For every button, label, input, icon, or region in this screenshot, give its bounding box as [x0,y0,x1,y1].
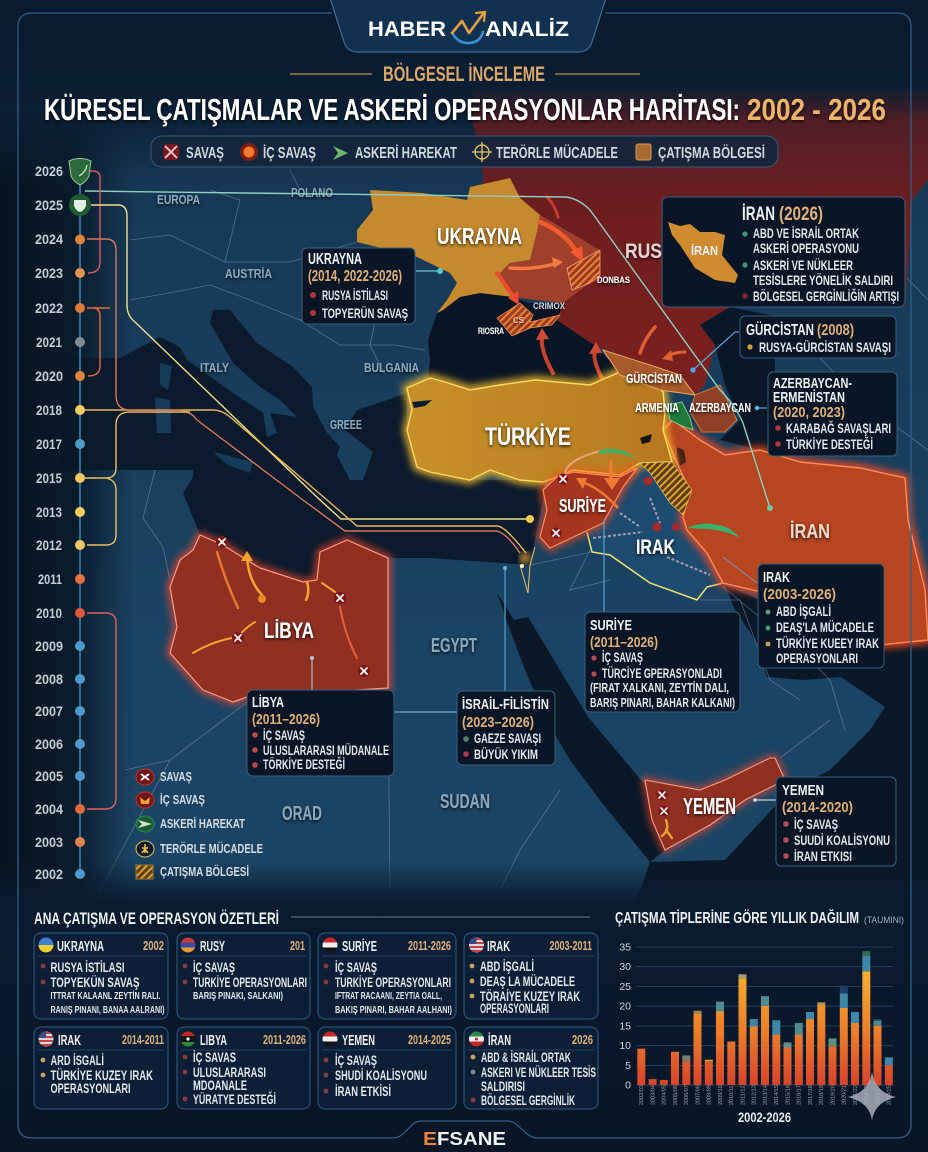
card: iran: ABD & İSRAİL ORTAK [481,1050,571,1065]
card: irak 2003-2011: ABD İŞGALİ [480,959,534,974]
2009: 2009 [35,638,63,654]
iraq yellow border [587,532,723,600]
operations: syria and iraq [550,449,757,583]
terörle mücadele: TERÖRLE MÜCADELE [160,841,263,856]
x axis ticks: 2013/14 [763,1085,769,1105]
region: syria [540,468,637,548]
callout: suriye [585,612,740,712]
callout: israil-filistin: BÜYÜK YIKIM [474,747,538,762]
card: irak 2014-2011 [34,1027,168,1109]
icon: terörle mücadele [472,142,492,162]
2012: 2012 [36,537,62,553]
2010: 2010 [36,605,62,621]
grid and y axis: 15 [619,1020,631,1032]
x markers [550,474,568,538]
region: ukraine [357,178,600,336]
sea: persian gulf and arabian sea [630,585,928,920]
card: iran: BÖLGESEL GERGİNLİK [481,1093,575,1108]
callout: libya: LİBYA [252,694,284,711]
legend bar: ASKERİ HAREKAT [355,144,457,162]
title: 2002 - 2026 [747,92,886,127]
2021 [36,334,85,350]
card: iran: İRAN [488,1032,511,1049]
callout: yemen: (2014-2020) [782,799,853,816]
card: rusy: TURKİYE OPERASYONLARI [193,975,307,990]
label: AUSTRİA [225,266,272,281]
card: suriye: SURİYE [342,938,377,955]
callout: yemen: İÇ SAVAŞ [794,817,838,832]
callout: iran: İRAN [742,204,775,225]
iç savaş: İÇ SAVAŞ [160,792,205,807]
marmara [412,400,432,408]
callout: irak [758,564,884,668]
icon: savaş [163,144,179,160]
flag [180,938,196,952]
icon: logo chart arrow [452,12,485,43]
x axis ticks: 2007/08 [695,1085,701,1105]
2023 [35,265,85,281]
callout: azerbaycan-ermenistan: AZERBAYCAN- [773,376,852,392]
callout: gürcistan [740,316,896,358]
x axis ticks: 2014/15 [774,1085,780,1105]
flag [322,938,338,952]
2008: 2008 [35,671,63,687]
yemen markers [656,790,672,838]
2006 [35,736,85,752]
grid and y axis [619,942,893,1092]
icon: iran mini map [668,222,738,283]
x axis ticks: 2018/19 [819,1085,825,1105]
card: libya: MDOANALE [193,1078,247,1093]
2003 [35,834,85,850]
x axis ticks: 2023/24 [875,1085,881,1105]
card: suriye: TURKİYE OPERASYONLARI [335,975,451,990]
x axis ticks: 2006/07 [684,1085,690,1105]
callout: irak: ABD İŞGALİ [776,604,831,619]
flag [180,1032,196,1046]
callout: irak: DEAŞ'LA MÜCADELE [776,620,874,635]
2004: 2004 [35,801,63,817]
x axis ticks: 2021/22 [853,1085,859,1105]
card: irak 2003-2011: IRAK [487,938,510,955]
year 2025: 2025 [35,197,63,213]
card: ukrayna [34,933,168,1019]
card: libya: LIBYA [200,1032,227,1049]
callout: gürcistan: GÜRCİSTAN [746,320,814,339]
label: TÜRKİYE [485,422,571,451]
label: SUDAN [440,791,490,813]
callout: iran: ASKERİ OPERASYONU [753,240,859,256]
card: libya: YÜRATYE DESTEĞİ [193,1092,276,1107]
2004 [35,801,85,817]
2007: 2007 [35,703,63,719]
savaş: SAVAŞ [160,769,192,784]
region: caucasus [603,350,737,432]
x axis ticks: 2022/23 [864,1085,870,1105]
label: POLANO [291,185,333,200]
bottom panel background [0,860,928,1152]
callout: ukrayna: TOPYERÜN SAVAŞ [322,305,408,321]
libya arrows [193,551,357,658]
callout: suriye: SURİYE [590,617,632,634]
callout: yemen: SUUDİ KOALİSYONU [794,833,890,848]
2002 [35,866,85,882]
x axis ticks [639,1085,892,1105]
bars [637,951,893,1085]
x axis ticks: 2017/18 [808,1085,814,1105]
callout: irak: IRAK [763,569,790,586]
callout: irak: TÜRKİYE KUEEY IRAK [776,636,879,651]
card: rusy: 201 [290,939,305,953]
logo: haber: HABER [368,18,446,41]
card: iran: 2026 [572,1033,593,1047]
card: suriye [318,933,456,1019]
card: yemen: SHUDİ KOALİSYONU [335,1068,427,1083]
card: irak 2003-2011: 2003-2011 [550,939,592,953]
card: rusy [177,933,310,1019]
callout: yemen [776,777,896,866]
card: libya: ULUSLARARASI [193,1065,266,1080]
2005: 2005 [35,768,63,784]
x axis ticks: 2019/20 [830,1085,836,1105]
card: yemen: 2014-2025 [408,1033,451,1047]
card: libya [177,1027,310,1109]
grid and y axis: 20 [619,1000,631,1012]
2005 [35,768,85,784]
conflict hatch zone [640,462,692,515]
callout: libya: TÖRKİYE DESTEĞİ [263,757,345,772]
label: ITALY [200,360,229,375]
libya markers [216,536,370,677]
legend bar [151,136,778,167]
callout: suriye: (2011–2026) [590,634,658,651]
card: irak 2003-2011: DEAŞ LA MÜCADELE [480,974,575,989]
card: iran [464,1027,598,1109]
kicker: BÖLGESEL İNCELEME [383,63,545,86]
occupied east [500,215,600,303]
summaries heading: ANA ÇATIŞMA VE OPERASYON ÖZETLERİ [34,909,279,928]
label: RIOSRA [478,326,504,336]
card: suriye: IFTRAT RACAANI, ZEYTIA OALL, [335,990,442,1002]
card: irak 2014-2011: ARD İSGALİ [50,1053,104,1068]
label: DONBAS [597,275,630,286]
callout: ukrayna: RUSYA İSTİLASI [322,287,388,303]
flag [322,1032,338,1046]
land fade left [0,100,135,930]
callout: irak: (2003-2026) [763,586,836,603]
callout: azerbaycan-ermenistan: ERMENİSTAN [773,389,845,406]
card: ukrayna: TOPYEKÜN SAVAŞ [50,975,140,990]
footer brand: FSANE [437,1129,506,1149]
grid and y axis: 35 [619,942,631,954]
sparkle watermark [848,1072,896,1120]
country borders [95,170,928,900]
timeline [35,158,91,882]
lake urmia [677,447,686,466]
2017 [36,436,85,452]
x axis ticks: 2003/04 [650,1085,656,1105]
x axis title: 2002-2026 [738,1109,791,1125]
callout: suriye: İÇ SAVAŞ [602,650,643,665]
callout: yemen: İRAN ETKISI [794,849,852,864]
label: CRIMOX [533,301,565,311]
callout: libya: İÇ SAVAŞ [263,728,305,743]
label: CS [513,316,525,325]
2024 [35,231,85,247]
callout: irak: OPERASYONLARI [776,651,858,666]
2009 [35,638,85,654]
flag [38,1032,54,1046]
2006: 2006 [35,736,63,752]
card: rusy: İÇ SAVAŞ [193,960,235,975]
callout: azerbaycan-ermenistan [768,372,897,456]
callout: azerbaycan-ermenistan: TÜRKİYE DESTEĞİ [786,435,873,452]
2017: 2017 [36,436,62,452]
grid and y axis: 30 [619,961,631,973]
region: russia [473,85,928,395]
callout: libya [247,690,394,776]
label: ORAD [282,803,322,825]
2015 [36,470,85,486]
2022 [35,300,85,316]
label: LİBYA [264,618,314,643]
card: rusy: BARIŞ PINAKI, SALKANI) [193,990,283,1002]
timeline connector lines [80,171,770,809]
legend bar: İÇ SAVAŞ [263,144,316,162]
callout: ukrayna: UKRAYNA [308,251,362,268]
icon: shield 2025 [69,194,91,216]
flag [469,1032,484,1046]
region: türkiye [407,372,672,482]
callout: gürcistan: (2008) [817,322,854,339]
x axis ticks: 2016/17 [796,1085,802,1105]
card: suriye: İÇ SAVAŞ [335,960,377,975]
label: YEMEN [683,793,736,819]
label: UKRAYNA [437,223,522,249]
card: libya: 2011-2026 [263,1033,306,1047]
callout: iran: (2026) [779,204,823,225]
x axis ticks: 2005/06 [673,1085,679,1105]
label: GÜRCİSTAN [626,371,682,386]
sea: mediterranean [60,310,545,582]
icon: askeri harekat [333,146,348,160]
chart: annual distribution [615,908,904,1125]
2020: 2020 [35,368,63,384]
card: yemen: İRAN ETKİSİ [335,1084,391,1099]
card: irak 2014-2011: OPERASYONLARI [50,1081,130,1096]
x axis ticks: 2002/03 [639,1085,645,1105]
callout: libya: ULUSLARARASI MÜDANALE [263,743,389,758]
2007 [35,703,85,719]
x axis ticks: 2004/05 [662,1085,668,1105]
label: SURİYE [559,496,606,516]
callout: azerbaycan-ermenistan: (2020, 2023) [773,405,845,421]
chart title: (TAUMINI) [864,915,904,925]
grid and y axis: 10 [619,1040,631,1052]
map labels [157,185,830,825]
card: ukrayna: RUSYA İSTİLASI [50,960,124,975]
callout: iran: ASKERİ VE NÜKLEER [753,257,853,273]
callout: yemen: YEMEN [782,782,824,799]
sea: black sea [428,280,620,390]
2020 [35,368,85,384]
card: suriye: 2011-2026 [408,939,451,953]
2011 [38,571,85,587]
callout: iran: İRAN [691,243,718,258]
label: ARMENIA [635,401,679,415]
icon: çatışma bölgesi [636,144,651,160]
2012 [36,537,85,553]
region: libya [170,535,388,702]
top fade [0,0,928,185]
x axis ticks: 2010/11 [729,1086,735,1105]
israel glow [520,547,535,593]
callout: suriye: BARIŞ PINARI, BAHAR KALKANI) [590,696,735,710]
card: irak 2014-2011: IRAK [58,1032,81,1049]
card: iran: ASKERI VE NÜKLEER TESİS [481,1065,596,1080]
callout leader lines [310,268,777,802]
label: EUROPA [157,192,200,207]
region: iran [663,420,928,645]
legend bar: ÇATIŞMA BÖLGESİ [658,143,765,162]
x axis ticks: 2009/10 [718,1085,724,1105]
grid and y axis: 0 [625,1080,631,1092]
callout: israil-filistin [457,691,555,765]
x axis ticks: 2015/16 [785,1085,791,1105]
2008 [35,671,85,687]
arrows: ukraine and black sea [497,197,685,380]
sea: red sea [497,593,665,862]
callout: ukrayna [302,248,415,324]
label: AZERBAYCAN [689,401,751,415]
callout: suriye: (FIRAT XALKANI, ZEYTİN DALI, [590,680,729,695]
2018 [36,402,85,418]
donbas hatch [567,250,600,290]
footer brand: E [423,1129,437,1149]
grid and y axis: 5 [625,1060,631,1072]
region: yemen [645,758,785,850]
card: irak 2014-2011: TÜRKİYE KUZEY IRAK [50,1068,153,1083]
2002: 2002 [35,866,63,882]
armenia [667,402,693,430]
card: yemen: İÇ SAVAŞ [335,1053,377,1068]
flag [38,938,54,952]
card: irak 2003-2011: TÖRAİYE KUZEY IRAK [480,989,580,1004]
callout: israil-filistin: İSRAİL-FİLİSTİN [462,696,549,713]
header tab [330,0,606,52]
card: irak 2003-2011: OPERASYONLARI [480,1001,549,1016]
year 2026: 2026 [35,163,63,179]
legend bar: TERÖRLE MÜCADELE [496,143,618,162]
2018: 2018 [36,402,62,418]
card: yemen [318,1027,456,1109]
islands [155,363,560,478]
icon: iç savaş [240,143,258,161]
2013: 2013 [36,504,62,520]
card: ukrayna: RANIŞ PINANI, BANAA AALRANI) [50,1004,164,1016]
legend bar: SAVAŞ [186,145,224,162]
çatışma bölgesi: ÇATIŞMA BÖLGESİ [160,864,249,879]
label: IRAK [636,536,675,559]
icon: shield 2026 [69,158,91,185]
label: GREEE [330,417,362,432]
card: ukrayna: ITTRAT KALAANL ZEYTİN RALI. [50,989,161,1002]
2003: 2003 [35,834,63,850]
flag [469,938,484,952]
x axis ticks: 2020/21 [842,1085,848,1105]
sea: caspian [700,307,775,455]
callout: israil-filistin: GAEZE SAVAŞI [474,731,541,746]
2015: 2015 [36,470,62,486]
card: ukrayna: 2002 [143,939,164,953]
region: iraq [587,468,723,600]
card: irak 2003-2011 [464,933,598,1019]
askeri harekat: ASKERİ HAREKAT [160,816,245,831]
callout: suriye: TÜRCİYE GPERASYONLADI [602,666,722,681]
2013 [36,504,85,520]
callout: ukrayna: (2014, 2022-2026) [308,268,402,285]
2021: 2021 [36,334,62,350]
card: irak 2014-2011: 2014-2011 [122,1033,164,1047]
2010 [36,605,85,621]
x axis ticks: 2008/09 [706,1085,712,1105]
2024: 2024 [35,231,63,247]
callout: israil-filistin: (2023–2026) [462,714,534,731]
lake van [640,434,652,444]
2022: 2022 [35,300,63,316]
2011: 2011 [38,571,62,587]
2023: 2023 [35,265,63,281]
card: suriye: BAKIŞ PINARI, BAHAR AALHANI) [335,1004,452,1016]
map legend [136,769,263,879]
label: İRAN [790,520,830,543]
crimea hatch [497,303,560,336]
label: RUS [625,240,662,263]
x axis ticks: 2024/25 [886,1085,892,1105]
callout: iran [662,197,905,307]
label: BULGANIA [364,360,419,375]
callout: libya: (2011–2026) [252,711,320,728]
card: yemen: YEMEN [342,1032,375,1049]
card: libya: İÇ SAVAS [193,1050,236,1065]
card: ukrayna: UKRAYNA [57,938,104,955]
card: rusy: RUSY [200,938,225,955]
logo: analiz: ANALİZ [485,18,569,41]
card: iran: SALDIRISI [481,1079,525,1094]
grid and y axis: 25 [619,981,631,993]
label: EGYPT [431,635,477,657]
x axis ticks: 2012/13 [752,1085,758,1105]
callout: iran: ABD VE İSRAİL ORTAK [753,225,859,241]
x axis ticks: 2011/12 [740,1086,746,1105]
